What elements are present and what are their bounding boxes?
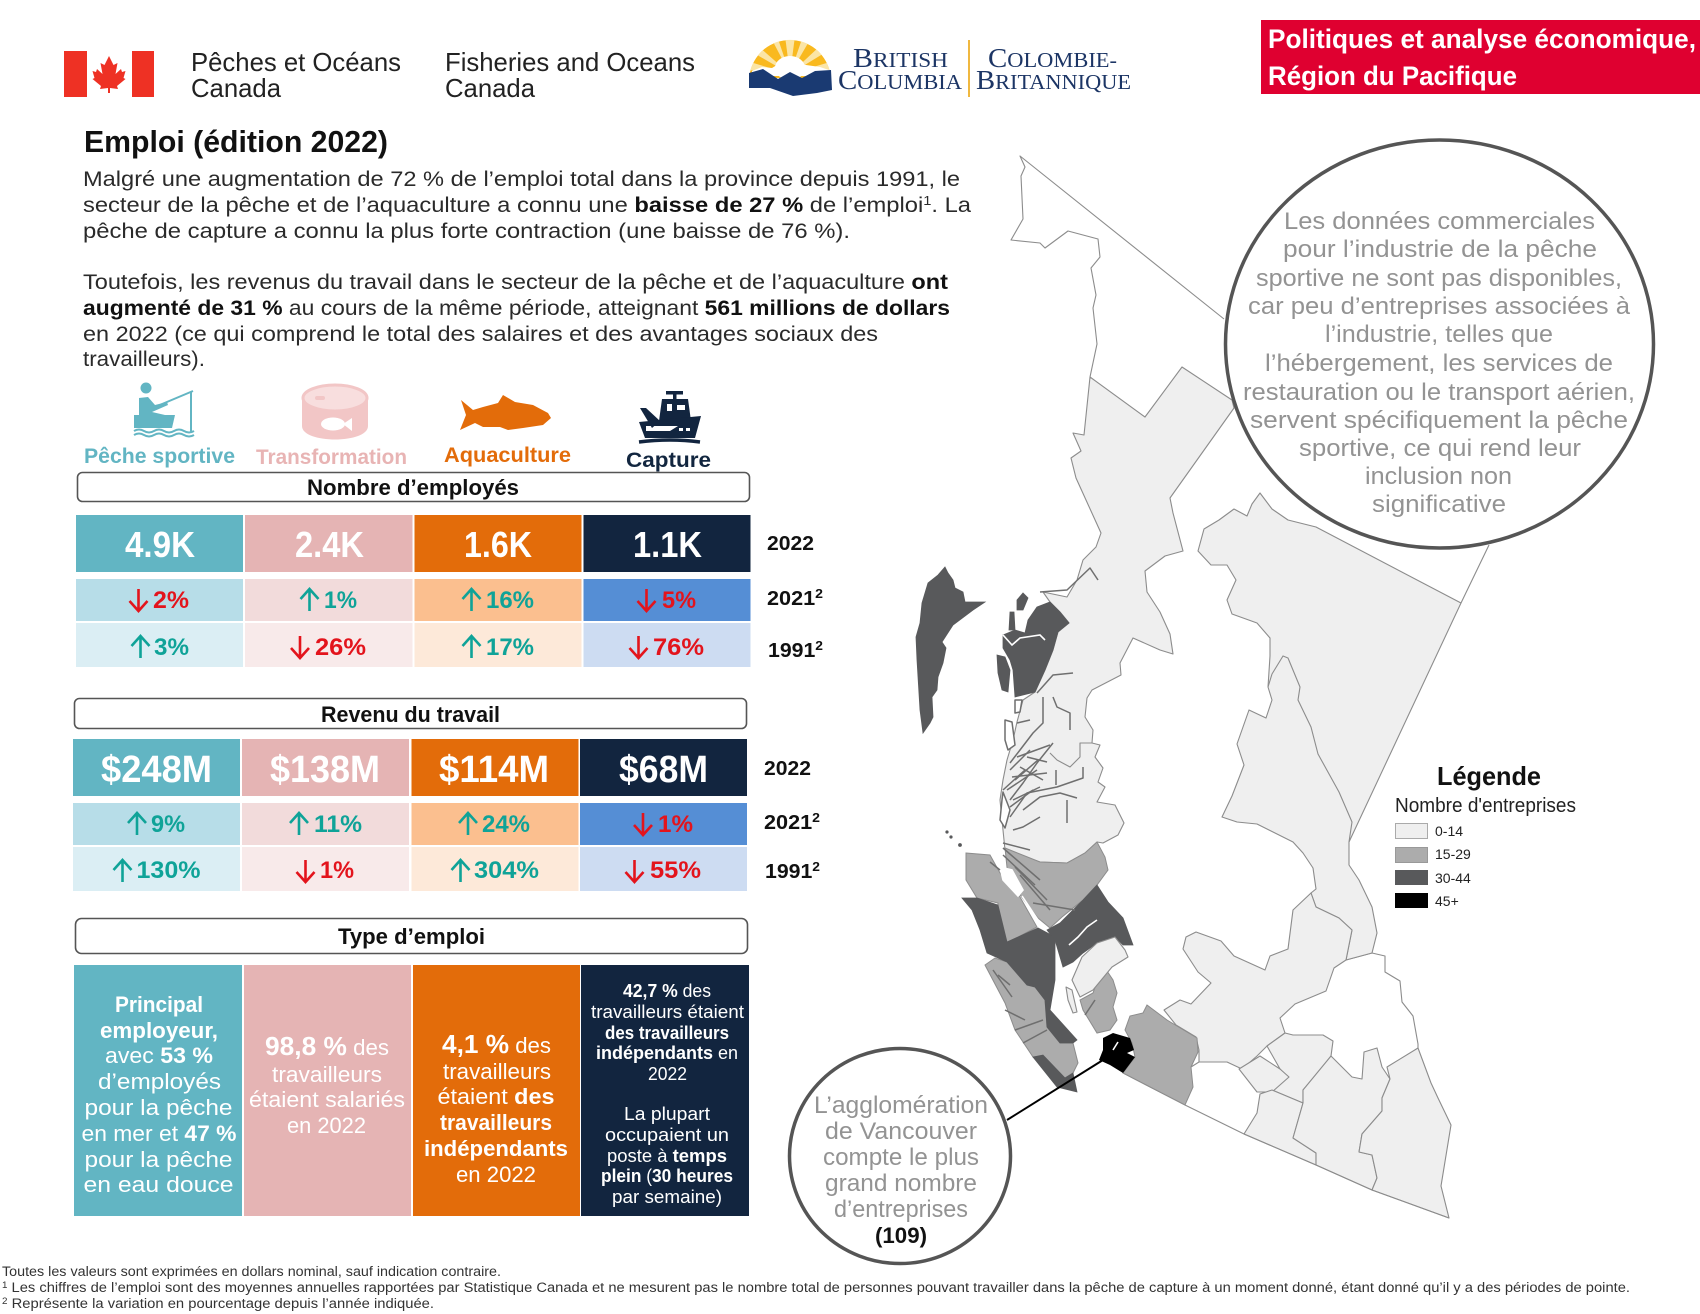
French wordmark: BRITANNIQUE [976,65,1131,95]
banner: Politiques et analyse économique: Région du Pacifique [1268,61,1517,91]
label: Transformation: Transformation [256,446,407,469]
row: employees change since 1991: 1991 [768,640,812,662]
row: income 2022 [73,739,811,796]
icon: salmon [460,395,551,430]
English wordmark: COLUMBIA [838,65,963,95]
row: income change since 1991 [73,847,820,891]
heading: Type d'emploi [76,918,748,954]
row: income change since 2021: 2 [812,810,820,825]
text block: intro paragraphs: augmenté de 31 % au cours de la même période, atteignant 561 millions de dollars [83,297,950,320]
card: sport fishing employment: employeur, [100,1018,218,1043]
callout: Vancouver has the most businesses: d’entreprises [834,1196,968,1223]
text block: intro paragraphs [83,168,971,371]
callout: sport fishing data note: servent spécifiquement la pêche [1250,407,1628,434]
header: Fisheries and Oceans Canada signature [64,47,695,103]
row: income change since 1991: 130% [136,857,200,884]
footnotes: 2 [2,1296,7,1306]
card: sport fishing employment: Principal [115,992,203,1017]
row: income change since 2021: 11% [314,811,362,838]
row: income change since 1991: 304% [474,857,539,884]
text block: intro paragraphs: en 2022 (ce qui comprend le total des salaires et des avantages sociaux des [83,323,878,346]
icon: BC sun and mountains [749,40,832,96]
label: Pêche sportive: Pêche sportive [84,445,235,468]
card: capture employment: occupaient un [605,1125,729,1145]
row: employees change since 1991: 26% [315,634,366,661]
card: capture employment: plein (30 heures [601,1166,733,1186]
card: processing employment: étaient salariés [249,1087,405,1112]
row: employees change since 2021: 5% [662,587,696,614]
callout: sport fishing data note: sportive ne sont pas disponibles, [1256,265,1622,292]
footnotes: Les chiffres de l’emploi sont des moyennes annuelles rapportées par Statistique Canada et ne mesurent pas le nombre total de personnes pouvant travailler dans la pêche de capture à un moment donné, étant donné qu’il y a des périodes de pointe. [7,1280,1630,1295]
icon: fishing boat [639,391,701,442]
callout: Vancouver has the most businesses [790,1048,1010,1264]
card: processing employment [244,965,411,1216]
row: employees change since 2021 [76,579,823,621]
banner: Politiques et analyse économique [1261,20,1700,94]
map: businesses by region of British Columbia [916,156,1489,1218]
row: income change since 2021 [73,803,820,845]
English department name [445,47,695,103]
callout: Vancouver has the most businesses: grand nombre [825,1170,977,1197]
row: income change since 2021: 24% [482,811,530,838]
row: employees change since 2021: 2% [153,587,189,614]
card: sport fishing employment: d’employés [98,1069,221,1094]
row: employees change since 1991 [76,623,823,667]
panel: type of employment [74,918,749,1216]
English wordmark [838,43,963,95]
card: aquaculture employment: travailleurs [443,1059,551,1084]
text block: intro paragraphs: . La [931,194,971,217]
footnotes: Représente la variation en pourcentage depuis l’année indiquée. [7,1296,434,1311]
footnotes: Toutes les valeurs sont exprimées en dollars nominal, sauf indication contraire. [2,1264,501,1279]
card: aquaculture employment: étaient des [438,1084,554,1109]
legend: number of businesses: 0-14 [1435,823,1463,839]
French department name: Canada [191,73,282,103]
callout: sport fishing data note: sportive, ce qui rend leur [1299,435,1581,462]
icon: Canadian flag [64,51,154,97]
row: employees change since 2021: 1% [324,587,357,614]
legend row: sector icons and names [84,382,711,472]
card: capture employment: des travailleurs [605,1023,729,1043]
row: income 2022: $248M [101,749,212,791]
callout: sport fishing data note: inclusion non [1365,463,1512,490]
callout: Vancouver has the most businesses: compte le plus [823,1144,979,1171]
card: aquaculture employment: travailleurs [440,1110,552,1135]
text block: intro paragraphs: travailleurs). [83,348,205,371]
row: income change since 1991: 1% [320,857,354,884]
icon: sport fishing [134,382,194,436]
French department name [191,47,401,103]
card: sport fishing employment [74,965,242,1216]
callout: sport fishing data note [1226,140,1654,548]
French wordmark: COLOMBIE- [988,43,1117,73]
footnotes: 1 [2,1280,7,1290]
legend: number of businesses: 45+ [1435,893,1459,909]
heading: Nombre d'employés: Nombre d’employés [307,475,519,500]
callout: sport fishing data note: l’hébergement, les services de [1265,350,1613,377]
callout: sport fishing data note: l’industrie, telles que [1325,321,1553,348]
card: aquaculture employment [413,965,580,1216]
card: capture employment: indépendants en [596,1043,738,1063]
card: aquaculture employment: 4,1 % des [442,1029,551,1059]
heading: Nombre d'employés [78,472,750,502]
callout: sport fishing data note: significative [1372,491,1506,518]
icon: canned fish [302,385,368,440]
card: processing employment: en 2022 [287,1113,366,1138]
card: processing employment: travailleurs [272,1062,382,1087]
French wordmark [976,43,1131,95]
logo: British Columbia [749,40,1130,97]
title: Emploi (édition 2022) [84,124,388,159]
label: Capture: Capture [626,449,711,472]
card: aquaculture employment: en 2022 [456,1162,536,1187]
card: aquaculture employment: indépendants [424,1136,568,1161]
text block: intro paragraphs: Toutefois, les revenus du travail dans le secteur de la pêche et de l’aquaculture ont [83,271,948,294]
panel: labour income [73,698,820,891]
row: employees 2022: 1.1K [633,524,702,565]
row: income change since 2021: 2021 [764,812,808,834]
card: sport fishing employment: pour la pêche [84,1147,232,1172]
footnotes [2,1264,1630,1311]
row: employees change since 2021: 2021 [767,588,812,610]
card: capture employment [581,965,749,1216]
legend: number of businesses: 15-29 [1435,846,1471,862]
row: employees 2022 [76,515,814,572]
heading: Revenu du travail [74,698,746,728]
card: sport fishing employment: en eau douce [84,1172,234,1197]
English wordmark: BRITISH [853,43,948,73]
row: income change since 2021: 1% [658,811,693,838]
card: capture employment: 2022 [648,1064,687,1084]
card: capture employment: travailleurs étaient [591,1002,744,1022]
card: processing employment: 98,8 % des [265,1031,389,1061]
card: sport fishing employment: pour la pêche [84,1095,232,1120]
callout: Vancouver has the most businesses: de Vancouver [825,1118,977,1145]
panel: number of employees [76,472,823,667]
heading: Revenu du travail: Revenu du travail [321,702,500,727]
legend: number of businesses: 30-44 [1435,870,1471,886]
text block: intro paragraphs: 1 [923,193,931,208]
text block: intro paragraphs: secteur de la pêche et de l’aquaculture a connu une baisse de 27 % de l’emploi [83,194,909,217]
row: employees change since 1991: 17% [486,634,534,661]
row: income change since 1991: 1991 [765,861,810,883]
banner: Politiques et analyse économique: Politiques et analyse économique, [1268,24,1696,54]
row: employees change since 1991: 3% [154,634,189,661]
text block: intro paragraphs: Malgré une augmentation de 72 % de l’emploi total dans la province depuis 1991, le [83,168,960,191]
card: sport fishing employment: en mer et 47 % [82,1121,236,1146]
English department name: Fisheries and Oceans [445,47,695,77]
callout: sport fishing data note: restauration ou le transport aérien, [1243,379,1635,406]
legend: number of businesses: Légende [1437,761,1541,791]
callout: sport fishing data note: Les données commerciales [1284,208,1595,235]
card: capture employment: La plupart [624,1104,710,1124]
callout: sport fishing data note: pour l’industrie de la pêche [1283,236,1597,263]
row: income change since 1991: 55% [650,857,701,884]
label: Aquaculture: Aquaculture [444,444,571,467]
card: capture employment: par semaine) [612,1187,722,1207]
row: income change since 1991: 2 [812,859,820,874]
row: employees 2022: 4.9K [125,524,195,565]
row: employees 2022: 2.4K [295,524,364,565]
legend: number of businesses: Nombre d'entreprises [1395,795,1576,817]
row: income 2022: $138M [270,749,380,791]
row: employees change since 2021: 16% [486,587,534,614]
row: employees change since 1991: 76% [653,634,704,661]
arrow: leader from callout to Vancouver [1007,1060,1103,1120]
English department name: Canada [445,73,536,103]
row: income 2022: $114M [439,749,549,791]
card: capture employment: poste à temps [607,1146,727,1166]
row: employees 2022: 2022 [767,533,814,555]
row: employees change since 1991: 2 [815,638,823,653]
row: income 2022: $68M [619,749,708,791]
callout: Vancouver has the most businesses: (109) [875,1223,927,1248]
row: income change since 2021: 9% [151,811,185,838]
row: employees change since 2021: 2 [815,586,823,601]
French department name: Pêches et Océans [191,47,401,77]
card: capture employment: 42,7 % des [623,981,711,1001]
callout: Vancouver has the most businesses: L’agglomération [814,1092,988,1119]
heading: Type d'emploi: Type d’emploi [338,924,485,949]
callout: sport fishing data note: car peu d’entreprises associées à [1248,293,1631,320]
text block: intro paragraphs: pêche de capture a connu la plus forte contraction (une baisse de 76 %). [83,220,850,243]
card: sport fishing employment: avec 53 % [105,1043,213,1068]
row: income 2022: 2022 [764,758,811,780]
legend: number of businesses [1395,761,1576,909]
row: employees 2022: 1.6K [464,524,532,565]
